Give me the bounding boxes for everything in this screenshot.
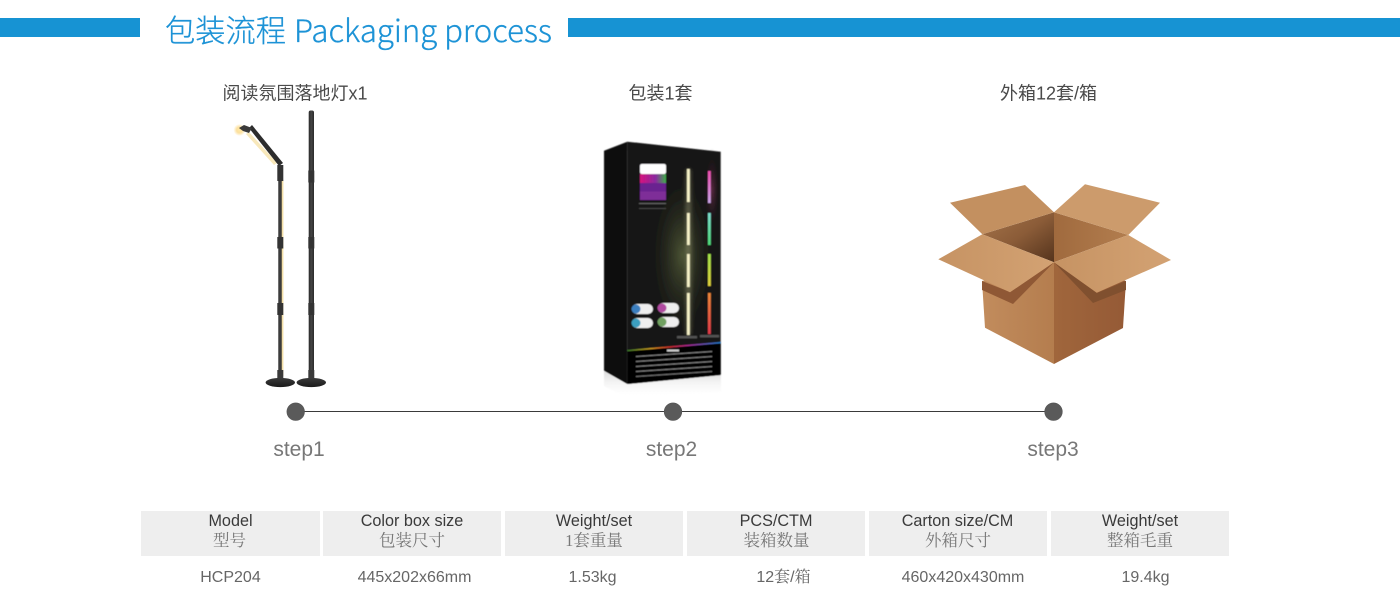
column: pcs per carton: 装箱数量 — [744, 531, 810, 550]
carton interior right — [1054, 212, 1128, 262]
carton left face — [982, 262, 1054, 364]
carton interior left — [982, 212, 1054, 262]
column: weight per set: 1.53kg — [568, 569, 617, 586]
illustration: open carton — [938, 184, 1171, 364]
box glow top right — [703, 148, 721, 232]
rgb lamp on box — [700, 171, 719, 337]
column: model: Model — [208, 512, 253, 530]
box front — [627, 142, 721, 384]
white lamp on box — [677, 169, 697, 338]
column: color box size — [323, 511, 501, 586]
flap shadow left — [982, 262, 1054, 304]
flap shadow right — [1054, 262, 1126, 303]
title — [165, 6, 552, 51]
header bar right — [568, 18, 1400, 37]
step2 text: step2 — [646, 438, 697, 461]
column: model: HCP204 — [200, 569, 261, 586]
column: color box size: 445x202x66mm — [358, 569, 471, 586]
front-right flap — [1054, 235, 1171, 293]
title: 包装流程 — [165, 6, 286, 51]
specification table — [141, 511, 1229, 586]
step 3 label: 外箱12套/箱 — [1000, 84, 1097, 104]
back-left flap — [950, 185, 1054, 234]
box reflection — [604, 371, 721, 398]
step 1 dot — [287, 403, 305, 421]
box side — [604, 142, 627, 384]
timeline line — [296, 411, 1053, 412]
box glow — [644, 160, 720, 350]
white lamp bloom on box — [686, 169, 691, 335]
unlit lamp — [297, 110, 326, 387]
step3 text: step3 — [1027, 438, 1079, 461]
column: pcs per carton — [687, 511, 865, 586]
box label — [639, 164, 666, 209]
column: weight per set — [505, 511, 683, 586]
title: Packaging process — [294, 6, 552, 51]
column: carton weight — [1051, 511, 1229, 586]
step 2 label: 包装1套 — [628, 84, 693, 104]
illustration: colour box — [604, 142, 721, 398]
column: carton size: 外箱尺寸 — [925, 531, 991, 550]
header — [0, 6, 1400, 51]
column: carton weight: 19.4kg — [1121, 569, 1170, 586]
step 3 dot — [1045, 403, 1062, 421]
column: carton weight: 整箱毛重 — [1107, 531, 1173, 550]
column: carton size: 460x420x430mm — [902, 569, 1024, 586]
column: carton size: Carton size/CM — [902, 512, 1013, 530]
step 2 dot — [664, 403, 682, 421]
rainbow line and warning panel — [627, 342, 721, 384]
column: carton size — [869, 511, 1047, 586]
column: pcs per carton: PCS/CTM — [740, 512, 812, 530]
front-left flap — [938, 234, 1054, 292]
lit lamp with bent arm — [234, 124, 295, 387]
column: color box size: 包装尺寸 — [379, 531, 445, 550]
back-right flap — [1054, 184, 1160, 235]
column: pcs per carton: 12套/箱 — [756, 568, 811, 586]
column: weight per set: Weight/set — [556, 512, 633, 530]
column: weight per set: 1套重量 — [565, 531, 623, 550]
step1 text: step1 — [273, 438, 325, 461]
timeline — [273, 403, 1079, 461]
step 1 label: 阅读氛围落地灯x1 — [222, 84, 368, 104]
column: carton weight: Weight/set — [1102, 512, 1179, 530]
header bar left — [0, 18, 140, 37]
carton right face — [1054, 262, 1126, 364]
column: model: 型号 — [213, 531, 246, 550]
column: model — [141, 511, 320, 586]
illustration: floor lamps — [234, 110, 326, 387]
column: color box size: Color box size — [361, 512, 463, 530]
feature pills — [632, 303, 679, 328]
